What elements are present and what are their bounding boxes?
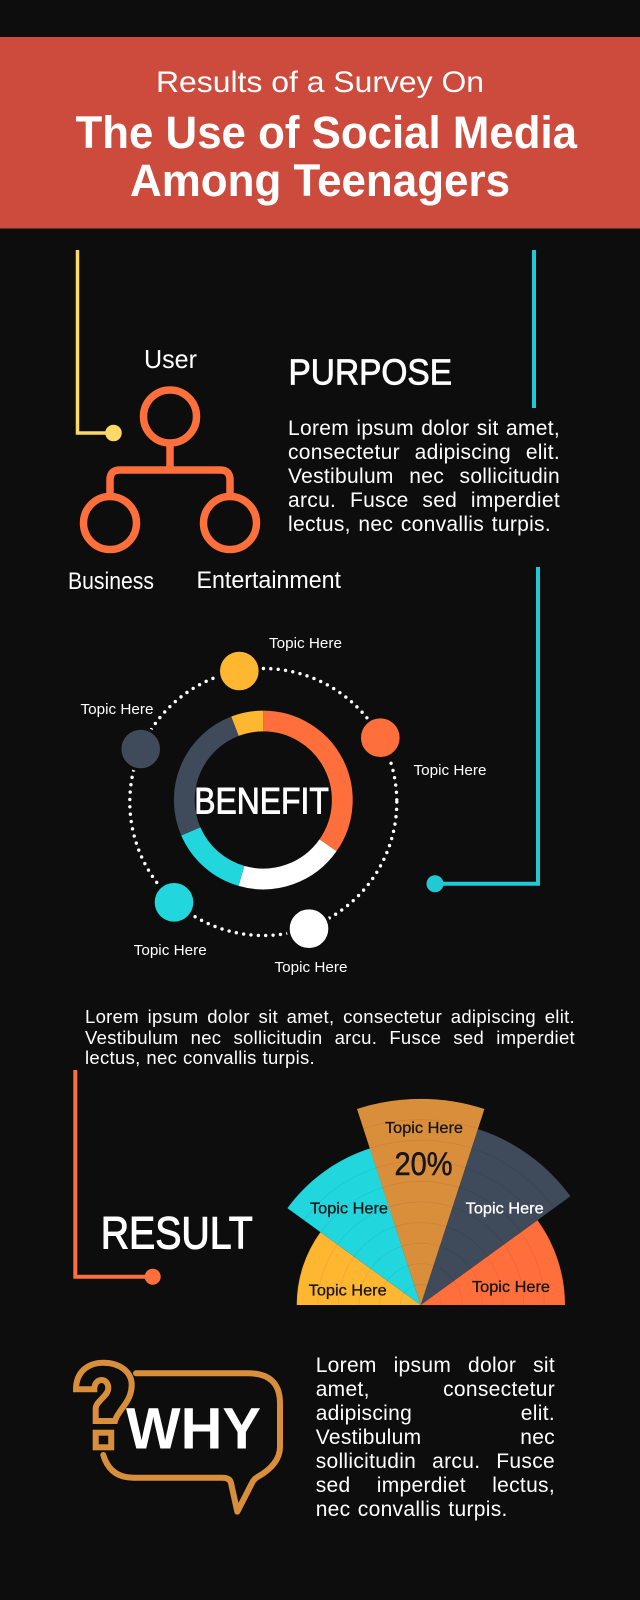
why speech bubble — [76, 1363, 280, 1512]
slice labels — [309, 1120, 550, 1300]
orange connector line — [75, 1070, 159, 1283]
purpose heading: PURPOSE — [288, 352, 452, 392]
node circles — [120, 650, 401, 950]
org chart icon — [84, 390, 256, 550]
slices — [297, 1232, 421, 1305]
why paragraph: sed imperdiet lectus, — [316, 1474, 555, 1497]
why paragraph: nec convallis turpis. — [316, 1498, 508, 1521]
subtitle: Results of a Survey On — [156, 66, 484, 99]
benefit radial diagram — [80, 635, 486, 976]
why label: WHY — [126, 1396, 261, 1461]
question mark — [76, 1363, 132, 1447]
why paragraph: Vestibulum nec — [316, 1426, 555, 1449]
title: The Use of Social Media — [76, 107, 578, 158]
yellow connector line — [78, 250, 120, 440]
polar area chart — [288, 1098, 570, 1305]
benefit paragraph: Vestibulum nec sollicitudin arcu. Fusce sed imperdiet — [85, 1027, 575, 1048]
benefit paragraph: Lorem ipsum dolor sit amet, consectetur adipiscing elit. — [85, 1006, 575, 1027]
why paragraph: adipiscing elit. — [316, 1402, 555, 1425]
org chart label: user: User — [144, 344, 197, 374]
benefit label: BENEFIT — [194, 780, 329, 821]
donut ring — [184, 721, 342, 879]
purpose paragraph: Vestibulum nec sollicitudin — [288, 465, 560, 488]
why paragraph: amet, consectetur — [316, 1378, 555, 1401]
org chart label: business: Business — [68, 568, 154, 595]
purpose paragraph: arcu. Fusce sed imperdiet — [288, 489, 560, 512]
cyan vertical line — [532, 250, 536, 408]
topic labels: Topic Here — [80, 701, 154, 718]
slice labels: Topic Here — [472, 1279, 550, 1296]
purpose paragraph: lectus, nec convallis turpis. — [288, 513, 551, 536]
purpose paragraph: consectetur adipiscing elit. — [288, 441, 560, 464]
percentage: 20% — [394, 1146, 452, 1182]
slice labels: Topic Here — [466, 1200, 544, 1218]
grid rings — [288, 1119, 565, 1305]
topic labels — [80, 635, 486, 976]
purpose paragraph: Lorem ipsum dolor sit amet, — [288, 417, 560, 440]
title — [76, 107, 578, 206]
slice labels: Topic Here — [309, 1282, 387, 1300]
topic labels: Topic Here — [134, 942, 207, 959]
header banner — [0, 37, 640, 228]
dotted orbit — [130, 668, 397, 936]
why paragraph: Lorem ipsum dolor sit — [316, 1354, 555, 1377]
bubble outline — [103, 1373, 280, 1512]
org chart label: entertainment: Entertainment — [196, 567, 341, 594]
topic labels: Topic Here — [414, 762, 486, 779]
why paragraph: sollicitudin arcu. Fusce — [316, 1450, 555, 1473]
purpose paragraph — [288, 417, 560, 536]
slice labels: Topic Here — [310, 1200, 388, 1218]
cyan connector line — [428, 567, 538, 890]
benefit paragraph — [85, 1006, 575, 1068]
title: Among Teenagers — [130, 155, 510, 206]
topic labels: Topic Here — [274, 959, 348, 976]
slice labels: Topic Here — [385, 1120, 463, 1137]
benefit paragraph: lectus, nec convallis turpis. — [85, 1047, 315, 1068]
result heading: RESULT — [101, 1207, 253, 1258]
topic labels: Topic Here — [269, 635, 342, 652]
why paragraph — [316, 1354, 555, 1521]
